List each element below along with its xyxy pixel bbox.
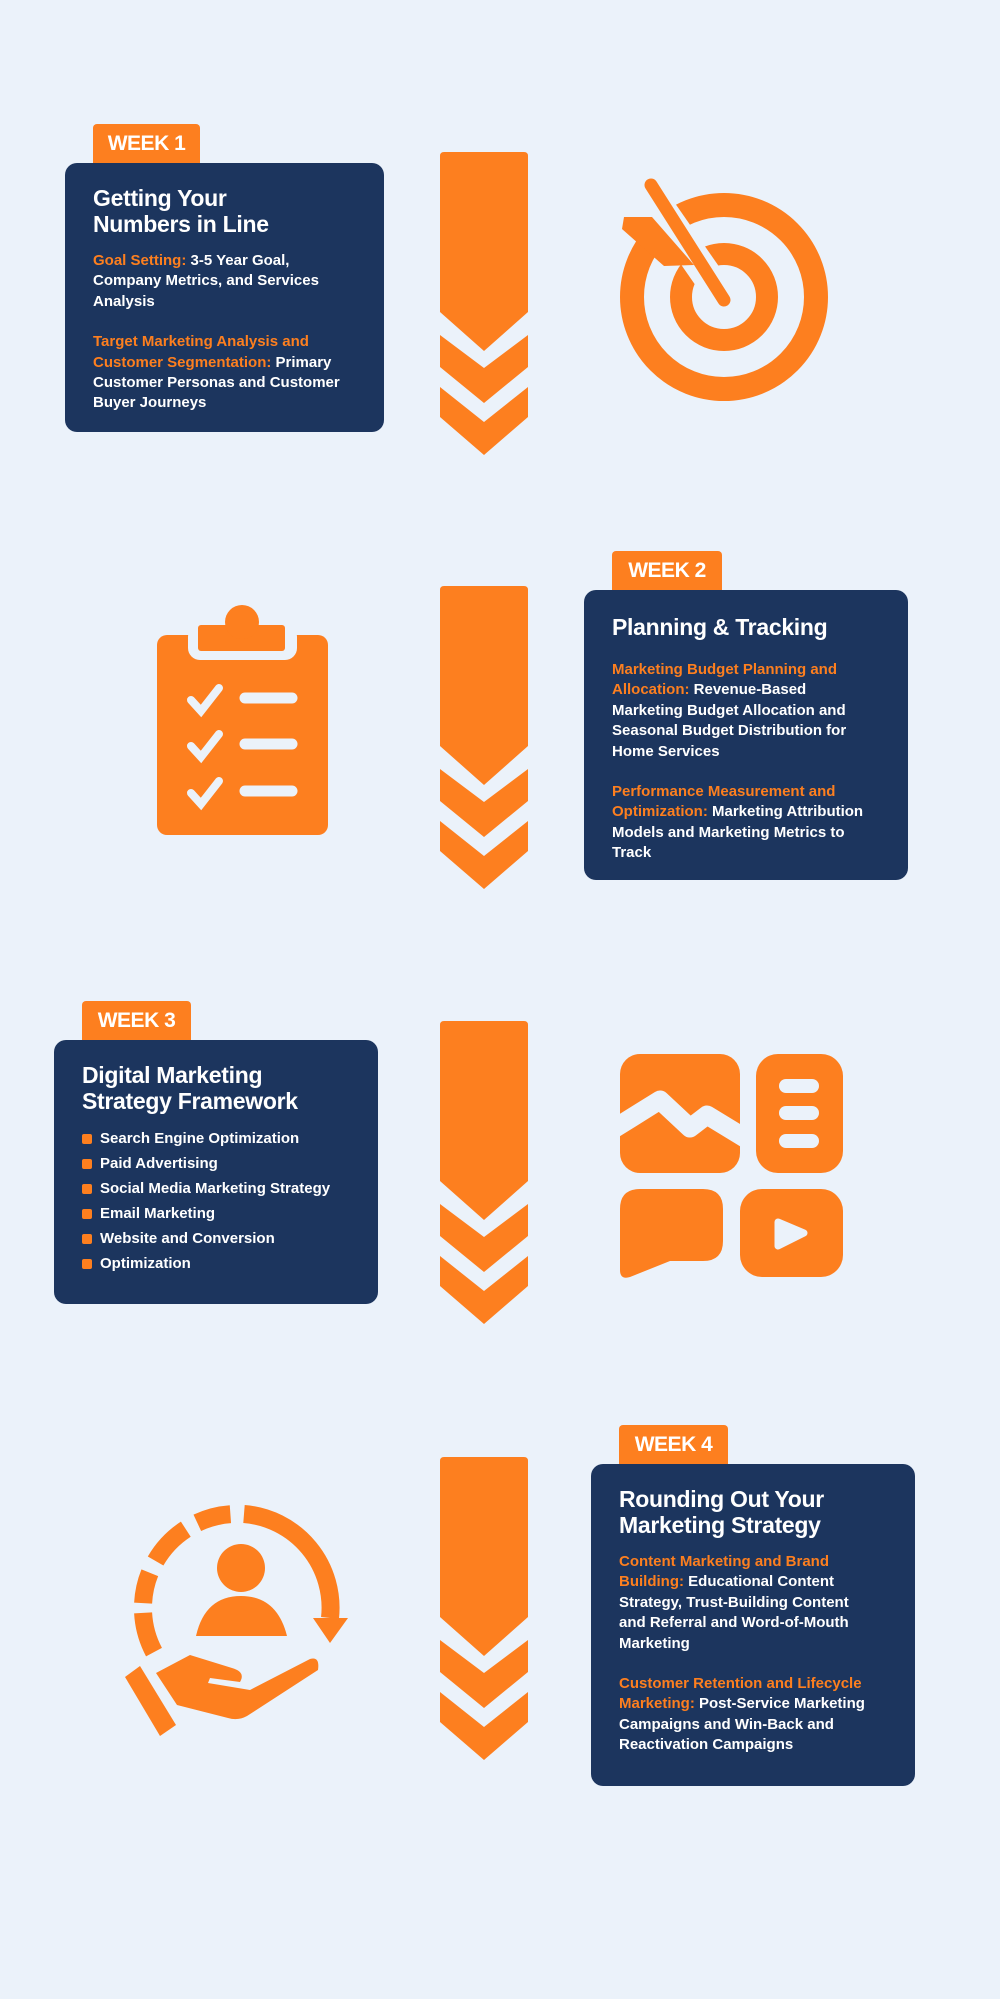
heading: week 4: Rounding Out Your (619, 1486, 824, 1512)
week 2 tab (612, 551, 722, 591)
panel: week 1 (65, 163, 384, 432)
list: channels: Search Engine Optimization (100, 1130, 299, 1147)
text block: budget: Marketing Budget Planning and Allocation: Revenue-Based Marketing Budget Allocation and Seasonal Budget Distribution for Home Services (612, 661, 846, 760)
arrow 1 (440, 152, 528, 455)
icon: customer retention (125, 1505, 348, 1736)
arrow 4 (440, 1457, 528, 1760)
list: channels: Paid Advertising (100, 1155, 218, 1172)
heading: week 2: Planning & Tracking (612, 614, 827, 640)
list: channels: Optimization (100, 1255, 191, 1272)
arrow 2 (440, 586, 528, 889)
icon: content tiles (620, 1054, 843, 1278)
heading: week 3: Digital Marketing (82, 1062, 262, 1088)
heading: week 3: Strategy Framework (82, 1088, 298, 1114)
list: channels: Email Marketing (100, 1205, 215, 1222)
icon: clipboard (157, 605, 328, 835)
text block: performance: Performance Measurement and Optimization: Marketing Attribution Models and Marketing Metrics to Track (612, 783, 863, 861)
heading: week 1: Getting Your (93, 185, 227, 211)
list: channels (82, 1130, 330, 1272)
panel: week 2 (584, 590, 908, 880)
heading: week 1: Numbers in Line (93, 211, 269, 237)
heading: week 4 (619, 1486, 824, 1538)
arrow 3 (440, 1021, 528, 1324)
panel: week 4 (591, 1464, 915, 1786)
week 2 tab: WEEK 2 (628, 559, 706, 582)
heading: week 4: Marketing Strategy (619, 1512, 821, 1538)
text block: retention: Customer Retention and Lifecycle Marketing: Post-Service Marketing Campaigns and Win-Back and Reactivation Campaigns (619, 1675, 865, 1753)
heading: week 3 (82, 1062, 298, 1114)
panel: week 3 (54, 1040, 378, 1304)
week 1 tab: WEEK 1 (108, 132, 185, 155)
week 3 tab: WEEK 3 (98, 1009, 175, 1032)
text block: content marketing: Content Marketing and Brand Building: Educational Content Strategy, Trust-Building Content and Referral and Word-of-Mouth Marketing (619, 1553, 849, 1652)
week 3 tab (82, 1001, 191, 1041)
icon: target (620, 178, 828, 401)
week 4 tab: WEEK 4 (635, 1433, 712, 1456)
text block: target marketing: Target Marketing Analysis and Customer Segmentation: Primary Customer Personas and Customer Buyer Journeys (93, 333, 340, 411)
week 4 tab (619, 1425, 728, 1465)
heading: week 1 (93, 185, 269, 237)
text block: goal setting: Goal Setting: 3-5 Year Goal, Company Metrics, and Services Analysis (93, 252, 319, 310)
list: channels: Website and Conversion (100, 1230, 275, 1247)
week 1 tab (93, 124, 200, 164)
list: channels: Social Media Marketing Strategy (100, 1180, 330, 1197)
